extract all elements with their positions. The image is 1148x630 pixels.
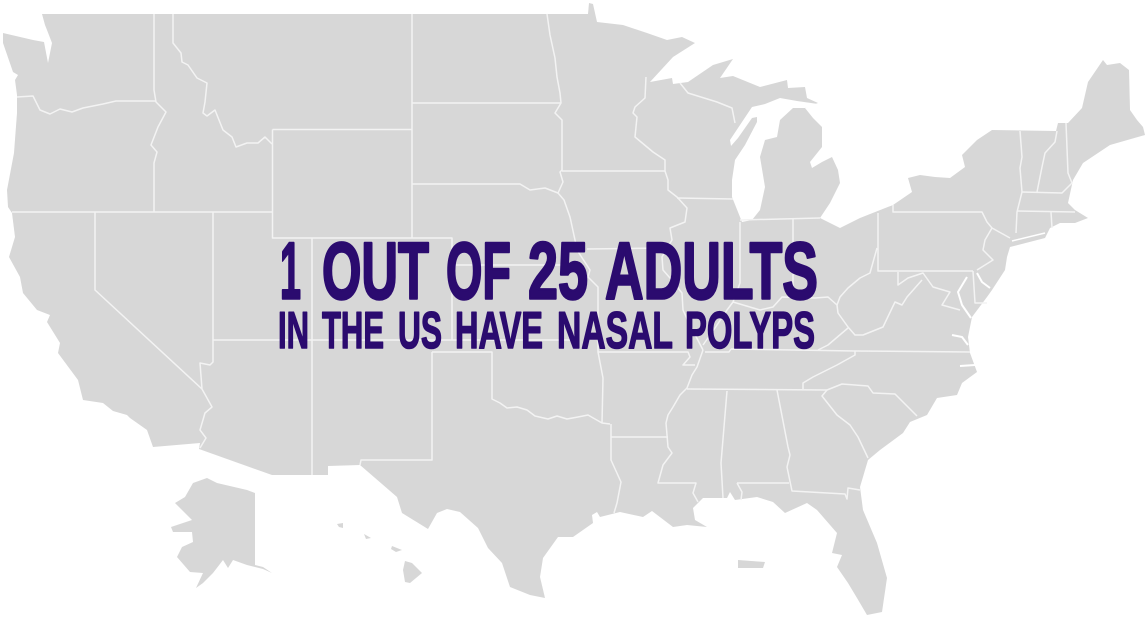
subheading: in the US have nasal polyps: US bbox=[398, 301, 442, 359]
heading: 1 out of 25 adults bbox=[280, 227, 818, 317]
heading: 1 out of 25 adults: OUT bbox=[322, 227, 429, 317]
heading: 1 out of 25 adults: OF bbox=[446, 227, 511, 317]
subheading: in the US have nasal polyps: NASAL bbox=[557, 301, 673, 359]
heading: 1 out of 25 adults: 25 bbox=[528, 227, 588, 317]
coastal inlets bbox=[42, 24, 1045, 366]
subheading: in the US have nasal polyps: THE bbox=[322, 301, 384, 359]
subheading: in the US have nasal polyps: HAVE bbox=[455, 301, 543, 359]
heading: 1 out of 25 adults: 1 bbox=[280, 227, 301, 317]
subheading: in the US have nasal polyps: IN bbox=[278, 301, 309, 359]
subheading: in the US have nasal polyps: POLYPS bbox=[685, 301, 815, 359]
heading: 1 out of 25 adults: ADULTS bbox=[605, 227, 818, 317]
Hawaii bbox=[337, 523, 422, 583]
state borders bbox=[12, 14, 1075, 513]
Great Lakes cut-out: Lake Michigan bbox=[730, 98, 818, 222]
Alaska bbox=[171, 478, 272, 588]
Puerto Rico bbox=[738, 560, 765, 568]
subheading: in the US have nasal polyps bbox=[278, 301, 815, 359]
